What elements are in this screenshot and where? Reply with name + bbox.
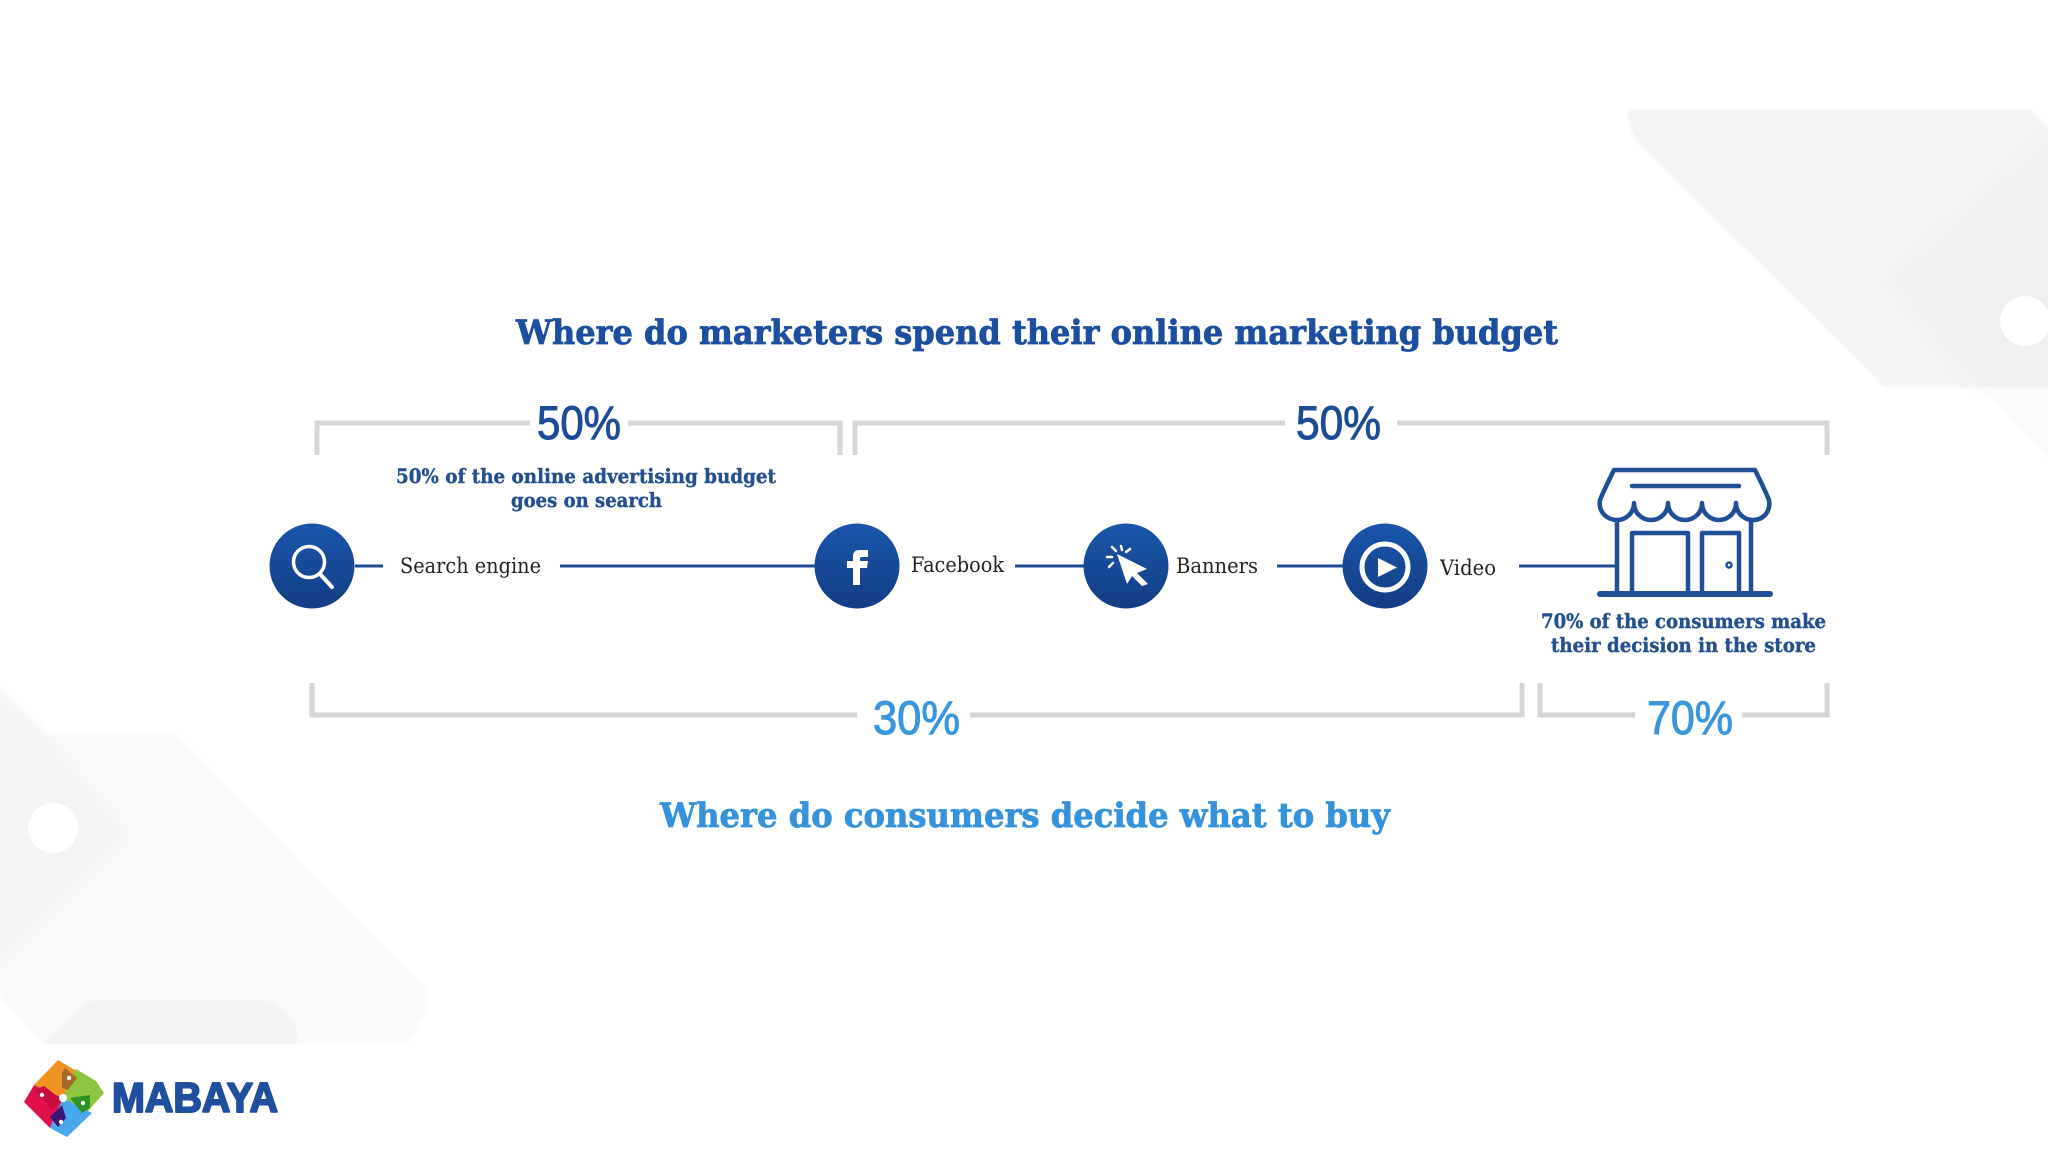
value: bottom right 70%: 70% [1647, 691, 1733, 744]
connector line [355, 564, 1617, 568]
value: top left 50%: 50% [537, 396, 621, 449]
icon: video [1342, 524, 1428, 608]
icon: facebook [814, 524, 900, 608]
logo mark [24, 1060, 104, 1137]
label: search engine: Search engine [400, 554, 541, 578]
callout: search budget [396, 464, 777, 512]
label: facebook: Facebook [911, 553, 1004, 577]
icon: store [1600, 470, 1770, 594]
callout: store decision: 70% of the consumers make [1541, 609, 1826, 633]
bracket: top left 50% [317, 396, 840, 455]
bracket: bottom right 70% [1540, 683, 1827, 744]
background shape: bottom left tag [0, 680, 460, 1064]
bracket: bottom left 30% [312, 683, 1522, 744]
logo wordmark: MABAYA [112, 1074, 278, 1121]
value: top right 50%: 50% [1296, 396, 1381, 449]
background shape: top right tag [1628, 110, 2048, 470]
value: bottom left 30%: 30% [873, 691, 960, 744]
icon: cursor [1084, 524, 1168, 608]
title: marketers: Where do marketers spend their online marketing budget [515, 313, 1558, 353]
logo: mabaya [24, 1060, 278, 1137]
icon: search [270, 524, 354, 608]
bracket: top right 50% [855, 396, 1827, 455]
callout: search budget: goes on search [511, 488, 662, 512]
callout: store decision [1541, 609, 1826, 657]
callout: search budget: 50% of the online advertising budget [396, 464, 777, 488]
callout: store decision: their decision in the store [1551, 633, 1816, 657]
label: video: Video [1439, 556, 1496, 580]
label: banners: Banners [1176, 554, 1258, 578]
title: consumers: Where do consumers decide what to buy [659, 796, 1391, 836]
